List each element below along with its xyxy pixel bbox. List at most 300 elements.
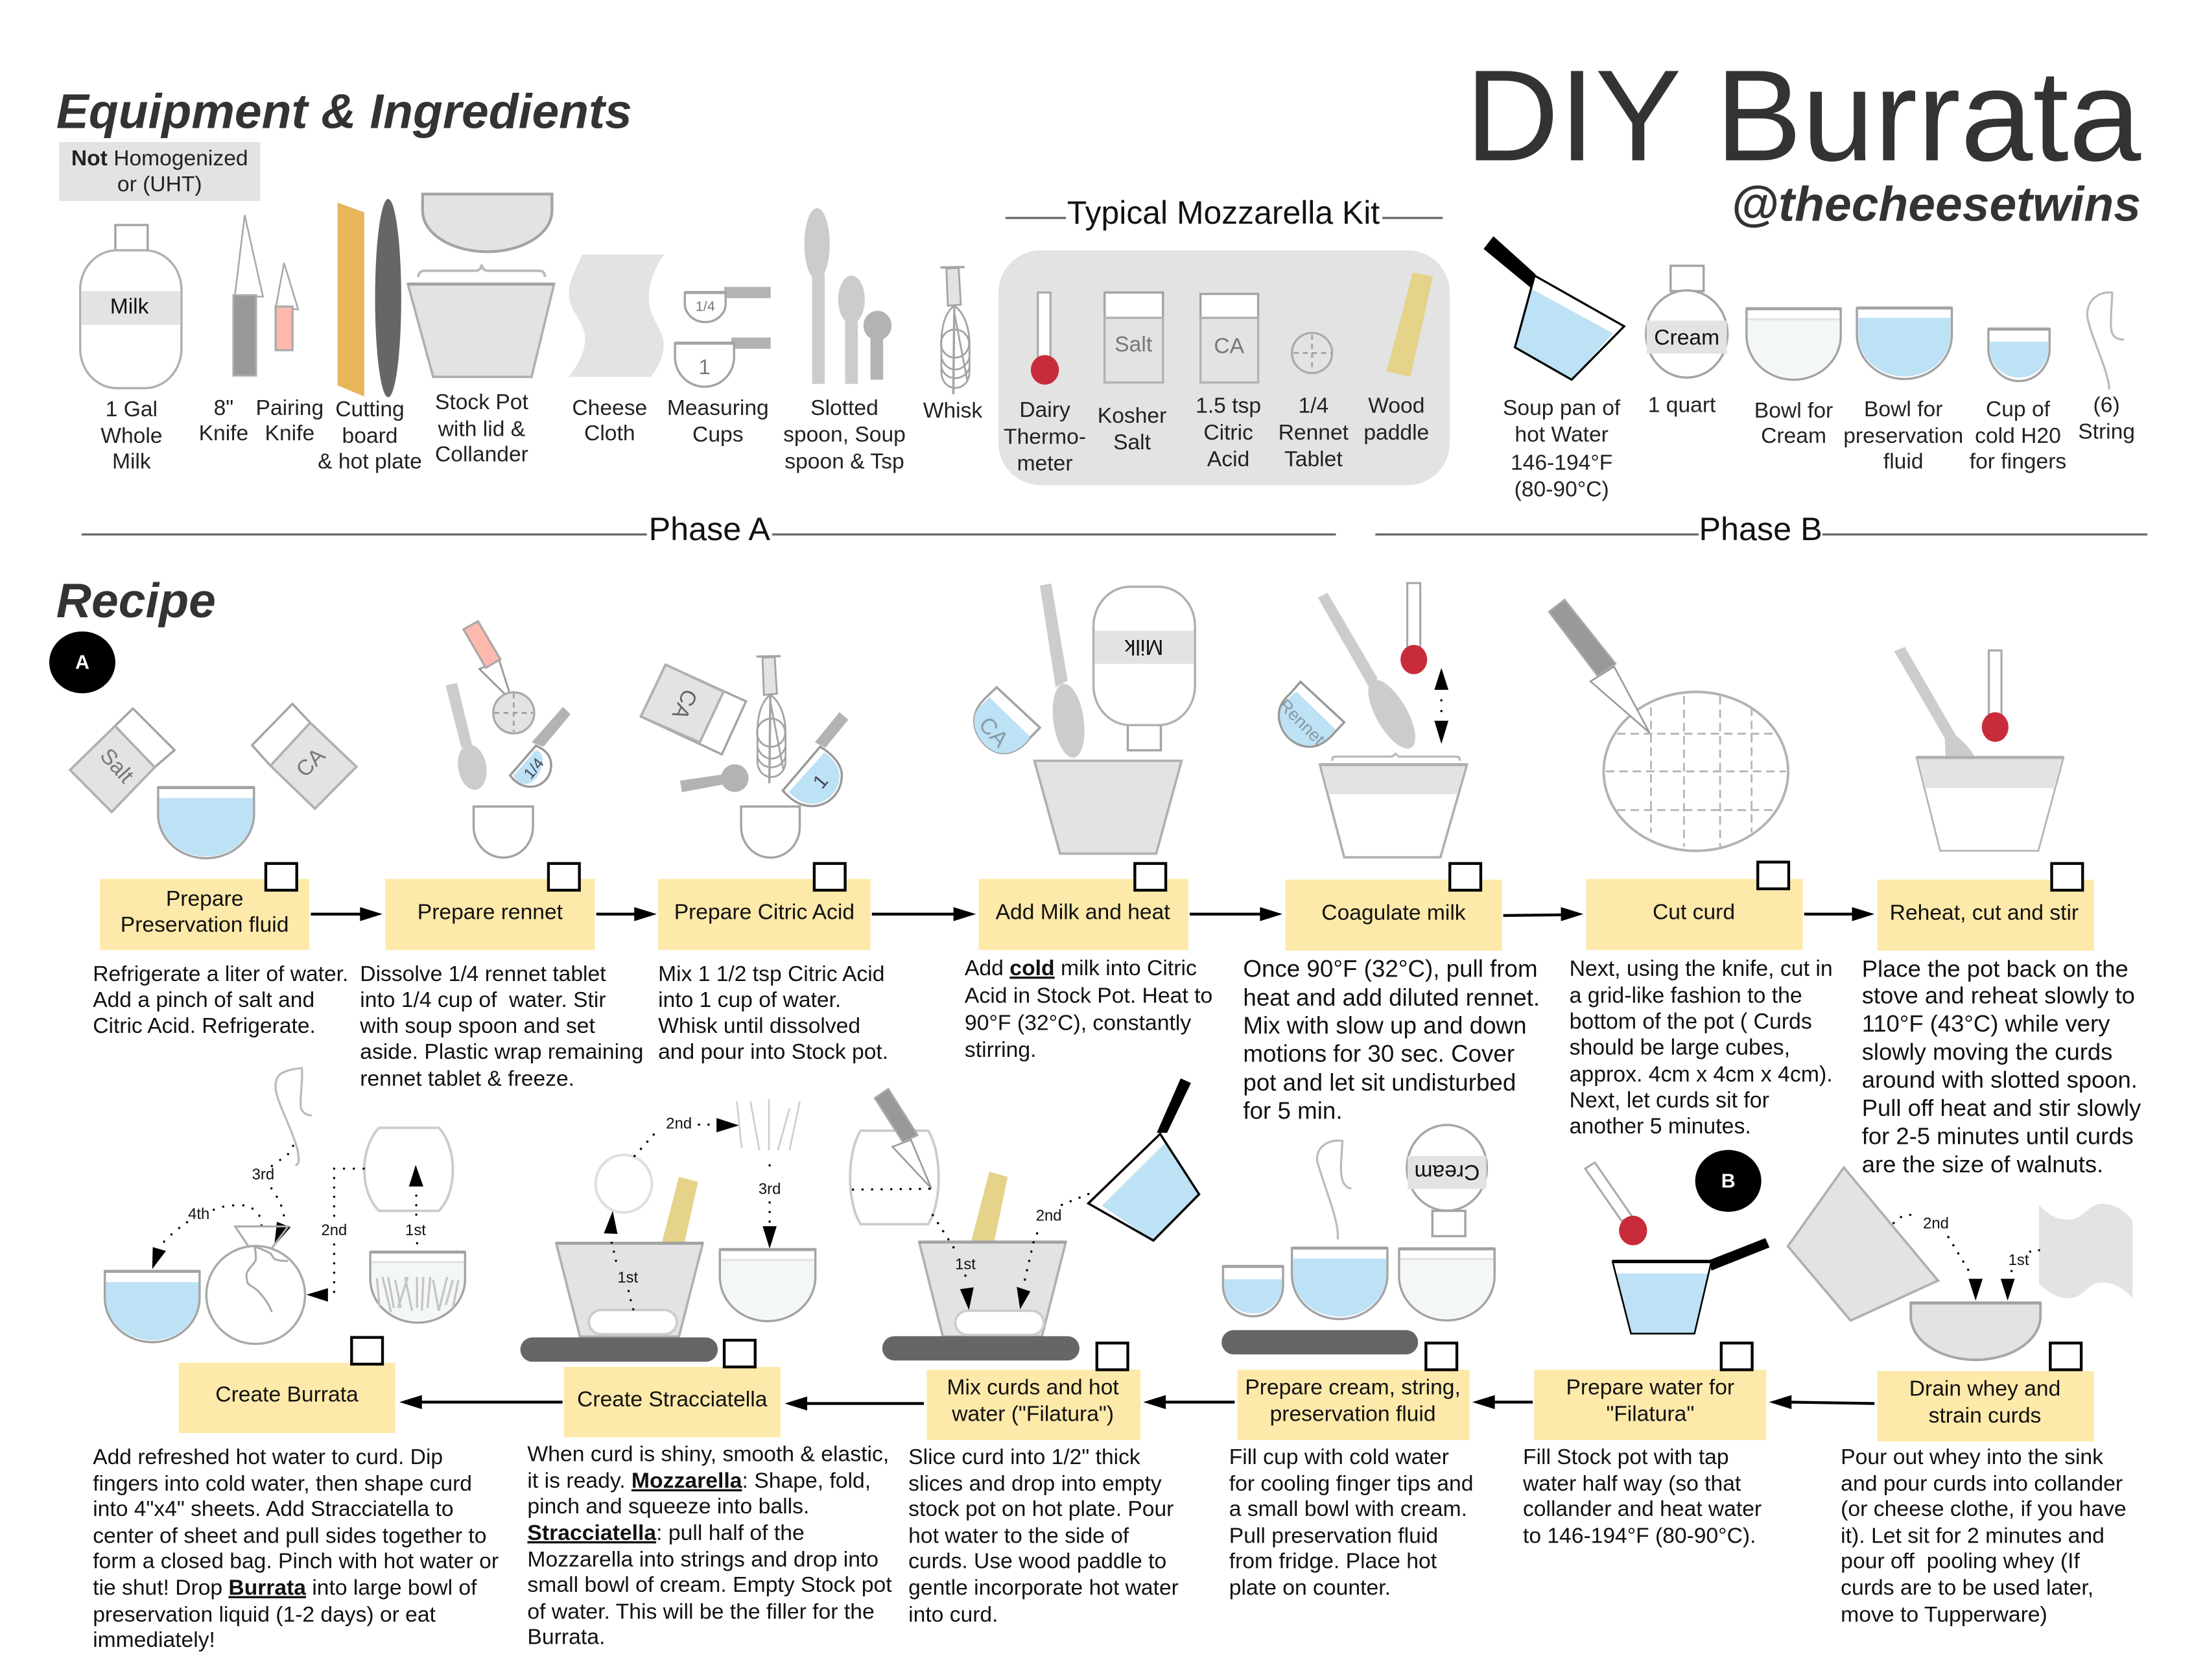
icon: hot plate [1221,1330,1418,1355]
text: create stracciatella: Stracciatella: pull half of the [527,1520,805,1545]
label: pairing knife: Pairing [256,396,324,420]
text: drain whey: Pour out whey into the sink [1841,1445,2103,1469]
label: spoons: Slotted [810,396,878,420]
dotted arrow: 3rd: 3rd [252,1166,274,1183]
step 1 box: Preservation fluid [121,913,289,937]
icon: quarter cup [510,707,571,787]
text: step 7: around with slotted spoon. [1862,1067,2138,1093]
label: cup of cold water: cold H20 [1975,424,2061,448]
icon: pairing knife [276,263,298,350]
label: pairing knife [256,396,324,445]
icon: cream bottle [1646,266,1728,377]
icon: soup pan pouring [1089,1078,1199,1240]
icon: wood paddle [971,1172,1008,1242]
illustration: prepare water for filatura [1585,1163,1769,1334]
label: bowl for cream: Bowl for [1754,399,1833,423]
label: soup pan: hot Water [1515,423,1609,447]
illustration: step 2 prepare rennet [445,621,571,858]
label: cream quantity: 1 quart [1648,393,1716,417]
icon: citric acid: CA [1214,334,1245,358]
label: bowl for cream: Cream [1761,424,1826,448]
label: bowl for preservation fluid: Bowl for [1864,397,1942,421]
text: step 7: Pull off heat and stir slowly [1862,1094,2141,1121]
icon: quarter cup: 1/4 [521,755,548,783]
label: rennet: 1/4 [1298,394,1328,418]
arrow [1472,1395,1533,1409]
label: rennet: Rennet [1279,421,1349,445]
text: step 2: rennet tablet & freeze. [360,1067,574,1091]
label: wood paddle: Wood [1368,394,1424,418]
text: mix curds: gentle incorporate hot water [908,1576,1179,1600]
dotted arrow: 1st: 1st [955,1255,976,1273]
text: step 2: with soup spoon and set [359,1014,595,1038]
text: step 5: Mix with slow up and down [1243,1012,1527,1039]
text: step 3: Whisk until dissolved [658,1014,860,1038]
text: drain whey: it). Let sit for 2 minutes and [1841,1523,2105,1548]
text: create stracciatella: small bowl of cream. Empty Stock pot [527,1572,892,1597]
icon: knife [1549,600,1649,733]
text: step 6: Next, using the knife, cut in [1570,956,1833,981]
icon: pairing knife cutting [464,621,512,702]
step 2 box [385,864,595,950]
icon: dairy thermometer [1031,292,1059,385]
step 12 box [926,1343,1140,1440]
step 3 box [658,864,871,950]
label: cheese cloth: Cheese [572,396,647,420]
label: bowl for cream [1754,399,1833,448]
dotted arrow: 3rd: 3rd [759,1180,781,1198]
icon: bowl for cream [1747,309,1841,380]
step 14 box [179,1338,395,1433]
arrow [596,907,657,921]
icon: cheese cloth [569,255,664,377]
dotted arrow: 2nd: 2nd [321,1222,347,1239]
text: step 2: Dissolve 1/4 rennet tablet [360,962,606,986]
text: step 6: a grid-like fashion to the [1570,983,1802,1008]
dotted arrow: 2nd: 2nd [666,1115,692,1133]
icon: covered stock pot [1320,754,1467,857]
label: bowl for preservation fluid: fluid [1883,449,1924,473]
text: prepare water: to 146-194°F (80-90°C). [1523,1524,1756,1548]
text: drain whey: and pour curds into collander [1841,1471,2123,1496]
dotted arrow: 2nd: 2nd [1036,1207,1062,1225]
label: rennet [1279,394,1349,471]
illustration: step 3 prepare citric acid [641,656,848,858]
label: stock pot [435,390,529,466]
step 9 box [1878,1343,2094,1441]
text: create stracciatella: When curd is shiny, smooth & elastic, [527,1442,889,1467]
icon: spoon in pot [1894,647,1974,757]
text: create burrata: fingers into cold water, then shape curd [93,1472,472,1496]
dotted arrow: 1st: 1st [2009,1251,2029,1269]
icon: pan of water [1612,1238,1769,1334]
text: step 7: Place the pot back on the [1862,955,2128,982]
icon: thermometer [1400,583,1427,674]
text: step 4: stirring. [965,1037,1036,1062]
step 3 box: Prepare Citric Acid [674,900,855,924]
title: DIY Burrata [1465,43,2141,188]
note: milk type: or (UHT) [117,172,202,196]
text: prepare water: collander and heat water [1523,1497,1762,1521]
text: step 1: Refrigerate a liter of water. [93,962,348,986]
arrow [784,1397,924,1410]
icon: rennet tablet [493,692,534,733]
icon: curd grid in pot [1604,692,1788,851]
icon: teaspoon [680,764,749,792]
label: soup pan: (80-90°C) [1515,478,1609,502]
text: create burrata: center of sheet and pull sides together to [93,1524,486,1548]
step 11 box: preservation fluid [1270,1402,1436,1426]
dotted arrow: 4th: 4th [188,1205,209,1223]
text: mix curds: curds. Use wood paddle to [908,1549,1166,1573]
label: cup of cold water [1970,397,2066,473]
step 5 box [1285,864,1502,951]
icon: citric acid box: CA [667,685,702,724]
illustration: step 7 reheat [1894,647,2064,851]
label: cheese cloth: Cloth [584,421,635,445]
text: create stracciatella: Burrata. [527,1624,605,1649]
label: stock pot: Stock Pot [435,390,529,414]
text: step 2: aside. Plastic wrap remaining [360,1040,643,1064]
label: cutting board and hot plate: Cutting [335,397,405,421]
text: step 4: 90°F (32°C), constantly [965,1011,1191,1035]
text: prepare cream: a small bowl with cream. [1229,1497,1467,1521]
label: soup pan: Soup pan of [1503,396,1621,420]
text: drain whey: (or cheese clothe, if you have [1841,1497,2127,1521]
arrow [1503,907,1583,921]
icon: cream bottle: Cream [1654,325,1719,349]
dotted arrow: 2nd: 2nd [1923,1215,1949,1233]
dotted arrow: 2nd [1017,1194,1089,1309]
text: mix curds: stock pot on hot plate. Pour [908,1497,1173,1521]
icon: bowl of preservation fluid [1292,1248,1387,1319]
illustration: create stracciatella [521,1099,816,1362]
label: cup of cold water: for fingers [1970,449,2066,473]
icon: string [1317,1141,1351,1239]
icon: rennet cup: Rennet [1275,695,1329,749]
icon: milk jug: Milk [110,295,149,319]
icon: kosher salt: Salt [1114,333,1153,357]
icon: cup of cold water [1223,1266,1283,1316]
text: create burrata: preservation liquid (1-2 days) or eat [93,1603,436,1627]
icon: milk jug upside down [1094,587,1195,750]
text: step 5: for 5 min. [1243,1097,1343,1124]
step 4 box: Add Milk and heat [996,900,1170,924]
text: create stracciatella: Mozzarella into strings and drop into [527,1547,878,1572]
illustration: step 4 add milk and heat [974,584,1195,854]
text: mix curds: slices and drop into empty [908,1472,1162,1496]
illustration: step 6 cut curd [1549,600,1788,851]
step 6 box: Cut curd [1653,900,1735,924]
arrow [311,907,383,921]
step 7 box [1878,864,2094,951]
icon: bowl of cream [720,1249,816,1321]
icon: whisk [757,656,786,783]
icon: mozzarella strands [737,1099,800,1150]
icon: salt box [70,709,174,812]
icon: one cup measure [783,712,848,806]
icon: bowl of cream [1399,1249,1494,1320]
icon: collander tilted [1788,1168,1938,1321]
text: step 3: Mix 1 1/2 tsp Citric Acid [658,962,884,986]
text: step 2: into 1/4 cup of water. Stir [360,988,606,1012]
text: step 5: pot and let sit undisturbed [1243,1069,1516,1096]
arrow [1190,907,1282,921]
icon: rennet cup [1275,681,1344,749]
icon: mozzarella sheet [364,1128,453,1211]
label: thermometer: meter [1017,452,1073,476]
label: whisk: Whisk [923,399,982,423]
label: measuring cups: Cups [692,423,744,447]
text: mix curds: Slice curd into 1/2" thick [908,1445,1140,1469]
text: prepare cream: for cooling finger tips and [1229,1471,1473,1496]
arrow [872,907,976,921]
icon: collander [423,194,552,252]
step 5 box: Coagulate milk [1321,901,1466,925]
label: thermometer: Dairy [1019,398,1070,422]
label: string [2078,393,2135,444]
step 1 box: Prepare [166,887,243,911]
illustration: step 1 preservation fluid [70,704,357,858]
text: step 3: and pour into Stock pot. [658,1040,888,1064]
icon: burrata bag [206,1227,305,1344]
step 4 box [979,864,1188,950]
icon: spoons [805,208,891,384]
text: step 6: Next, let curds sit for [1570,1088,1769,1113]
label: cheese cloth [572,396,647,445]
icon: stock pot on hot plate [882,1242,1079,1360]
icon: measuring cups: 1 [699,355,711,379]
step 10 box [1534,1343,1766,1440]
label: knife [199,396,248,445]
label: string: (6) [2093,393,2120,417]
icon: citric acid box: CA [292,744,331,782]
icon: milk jug upside down: Milk [1124,635,1163,659]
icon: milk jug [80,225,182,388]
label: citric acid: 1.5 tsp [1196,394,1261,418]
text: step 6: should be large cubes, [1570,1035,1790,1060]
dotted arrow: 2nd [306,1168,364,1302]
step 1 box [100,864,309,950]
icon: string [276,1068,312,1165]
step 13 box: Create Stracciatella [577,1388,768,1412]
step 13 box [564,1340,781,1437]
heading: recipe: Recipe [56,573,216,628]
handle: @thecheesetwins [1731,177,2141,231]
icon: soup pan [1483,236,1624,380]
icon: slotted spoon [1040,584,1089,760]
badge B [1695,1150,1762,1212]
illustration: step 5 coagulate milk [1275,583,1467,857]
label: citric acid: Citric [1203,421,1253,445]
icon: citric acid cup: CA [974,713,1013,753]
dotted arrow: 1st [933,1215,976,1310]
icon: hot plate [375,199,401,397]
step 14 box: Create Burrata [215,1382,359,1406]
arrow [1804,907,1874,921]
icon: citric acid [1201,294,1258,383]
icon: mozzarella ball [596,1155,652,1213]
icon: cream bottle upside down [1407,1125,1487,1236]
dotted line: slice [853,1189,931,1190]
dotted arrow: 1st: 1st [617,1269,639,1286]
icon: bowl of stracciatella [370,1252,465,1323]
text: step 7: stove and reheat slowly to [1862,982,2135,1009]
icon: citric acid cup [974,687,1040,753]
text: step 1: Citric Acid. Refrigerate. [93,1014,316,1038]
icon: citric acid box [641,665,746,754]
label: citric acid [1196,394,1261,471]
phase divider B: Phase B [1699,510,1822,547]
icon: salt box: Salt [95,744,138,788]
icon: cheese cloth [2039,1204,2132,1298]
step 12 box: water ("Filatura") [951,1402,1114,1426]
label: thermometer [1004,398,1086,476]
text: create burrata: form a closed bag. Pinch with hot water or [93,1549,499,1573]
icon: soup spoon [445,683,490,792]
phase divider A: Phase A [649,510,770,547]
text: step 7: slowly moving the curds [1862,1038,2112,1065]
text: prepare cream: from fridge. Place hot [1229,1548,1437,1573]
label: stock pot: with lid & [438,417,525,441]
step 10 box: Prepare water for [1566,1375,1734,1399]
label: measuring cups [667,396,769,447]
text: mix curds: into curd. [908,1603,998,1627]
text: drain whey: curds are to be used later, [1841,1576,2093,1600]
illustration: create burrata [105,1068,465,1344]
text: prepare cream: Pull preservation fluid [1229,1523,1438,1548]
icon: thermometer [1585,1163,1647,1246]
step 9 box: strain curds [1929,1404,2041,1428]
label: pairing knife: Knife [265,421,314,445]
icon: cream bottle upside down: Cream [1414,1160,1480,1184]
label: measuring cups: Measuring [667,396,769,420]
label: milk: Whole [100,424,162,448]
text: step 4: Acid in Stock Pot. Heat to [965,983,1212,1008]
badge A: A [75,652,89,673]
illustration: drain whey [1788,1168,2132,1360]
label: stock pot: Collander [435,442,528,466]
icon: measuring cups: 1/4 [696,298,715,314]
step 9 box: Drain whey and [1909,1377,2060,1401]
heading: equipment and ingredients: Equipment & Ingredients [56,84,632,138]
text: prepare cream: plate on counter. [1229,1576,1391,1600]
text: create stracciatella: it is ready. Mozzarella: Shape, fold, [527,1469,871,1493]
icon: one cup measure: 1 [809,771,832,793]
illustration: mix curds [850,1078,1199,1360]
label: milk: 1 Gal [106,397,158,421]
icon: cup of cold water [1988,329,2049,381]
label: kosher salt: Salt [1113,431,1151,455]
label: cutting board and hot plate [318,397,422,473]
step 11 box: Prepare cream, string, [1245,1375,1461,1399]
icon: string [2087,292,2124,390]
icon: kosher salt [1105,292,1163,383]
icon: wood paddle [662,1177,698,1243]
icon: slotted spoon [1318,593,1424,755]
icon: whisk [940,267,969,394]
text: mix curds: hot water to the side of [908,1524,1129,1548]
text: create burrata: into 4"x4" sheets. Add Stracciatella to [93,1497,454,1521]
text: step 7: for 2-5 minutes until curds [1862,1122,2134,1149]
text: prepare water: Fill Stock pot with tap [1523,1445,1729,1469]
text: create stracciatella: pinch and squeeze into balls. [527,1494,809,1519]
dotted arrow: 1st [405,1165,426,1262]
icon: stock pot [1035,761,1181,854]
label: kosher salt [1098,404,1166,455]
text: step 6: another 5 minutes. [1570,1114,1751,1139]
label: rennet: Tablet [1284,447,1343,471]
note: milk type: Not Homogenized [71,147,248,171]
label: spoons: spoon & Tsp [784,449,904,473]
icon: measuring cups [675,287,771,386]
text: step 6: approx. 4cm x 4cm x 4cm). [1570,1062,1833,1087]
icon: knife slicing [875,1089,932,1189]
step 10 box: "Filatura" [1606,1402,1694,1426]
text: step 7: are the size of walnuts. [1862,1151,2103,1177]
icon: wood paddle [1387,272,1433,377]
step 2 box: Prepare rennet [418,900,563,924]
text: step 5: motions for 30 sec. Cover [1243,1041,1515,1067]
label: cup of cold water: Cup of [1986,397,2051,421]
arrow [399,1395,563,1409]
text: prepare water: water half way (so that [1522,1472,1741,1496]
note: milk type [59,142,260,201]
text: create burrata: immediately! [93,1628,215,1652]
icon: stock pot on hot plate [521,1243,718,1362]
label: citric acid: Acid [1207,447,1249,471]
panel: mozzarella kit [998,250,1450,485]
icon: empty small bowl [741,807,800,858]
icon: rennet tablet [1292,333,1332,373]
text: step 4: Add cold milk into Citric [965,956,1197,980]
text: step 5: heat and add diluted rennet. [1243,984,1540,1011]
step 11 box [1238,1343,1470,1440]
icon: 8 inch knife [233,215,263,375]
illustration: prepare cream, string, preservation fluid [1221,1125,1494,1355]
arrow [1143,1395,1234,1409]
icon: bowl of curds [1911,1303,2040,1360]
text: drain whey: move to Tupperware) [1841,1602,2047,1627]
label: soup pan [1503,396,1621,502]
icon: stock pot with lid [408,265,554,377]
heading: typical mozzarella kit: Typical Mozzarella Kit [1067,195,1380,231]
icon: stock pot [1916,757,2064,851]
label: spoons: spoon, Soup [783,423,906,447]
label: cutting board and hot plate: board [342,424,397,448]
step 12 box: Mix curds and hot [947,1375,1119,1399]
text: step 6: bottom of the pot ( Curds [1570,1010,1812,1034]
label: thermometer: Thermo- [1004,425,1086,449]
icon: mozzarella log [850,1131,939,1224]
icon: citric acid box [252,704,357,809]
badge A [49,632,115,693]
dotted arrow: 1st [604,1211,639,1309]
icon: cutting board [338,202,364,397]
label: spoons [783,396,906,473]
icon: empty small bowl [474,807,533,858]
text: create burrata: tie shut! Drop Burrata into large bowl of [93,1576,477,1600]
text: step 5: Once 90°F (32°C), pull from [1243,955,1538,982]
text: prepare cream: Fill cup with cold water [1229,1445,1449,1469]
label: wood paddle [1363,394,1429,445]
text: step 1: Add a pinch of salt and [93,988,314,1012]
icon: bowl for preservation fluid [1857,308,1952,379]
label: knife: Knife [199,421,248,445]
dotted arrow: 2nd [635,1115,739,1156]
dotted arrow: 1st: 1st [405,1222,426,1239]
arrow [1769,1395,1874,1409]
